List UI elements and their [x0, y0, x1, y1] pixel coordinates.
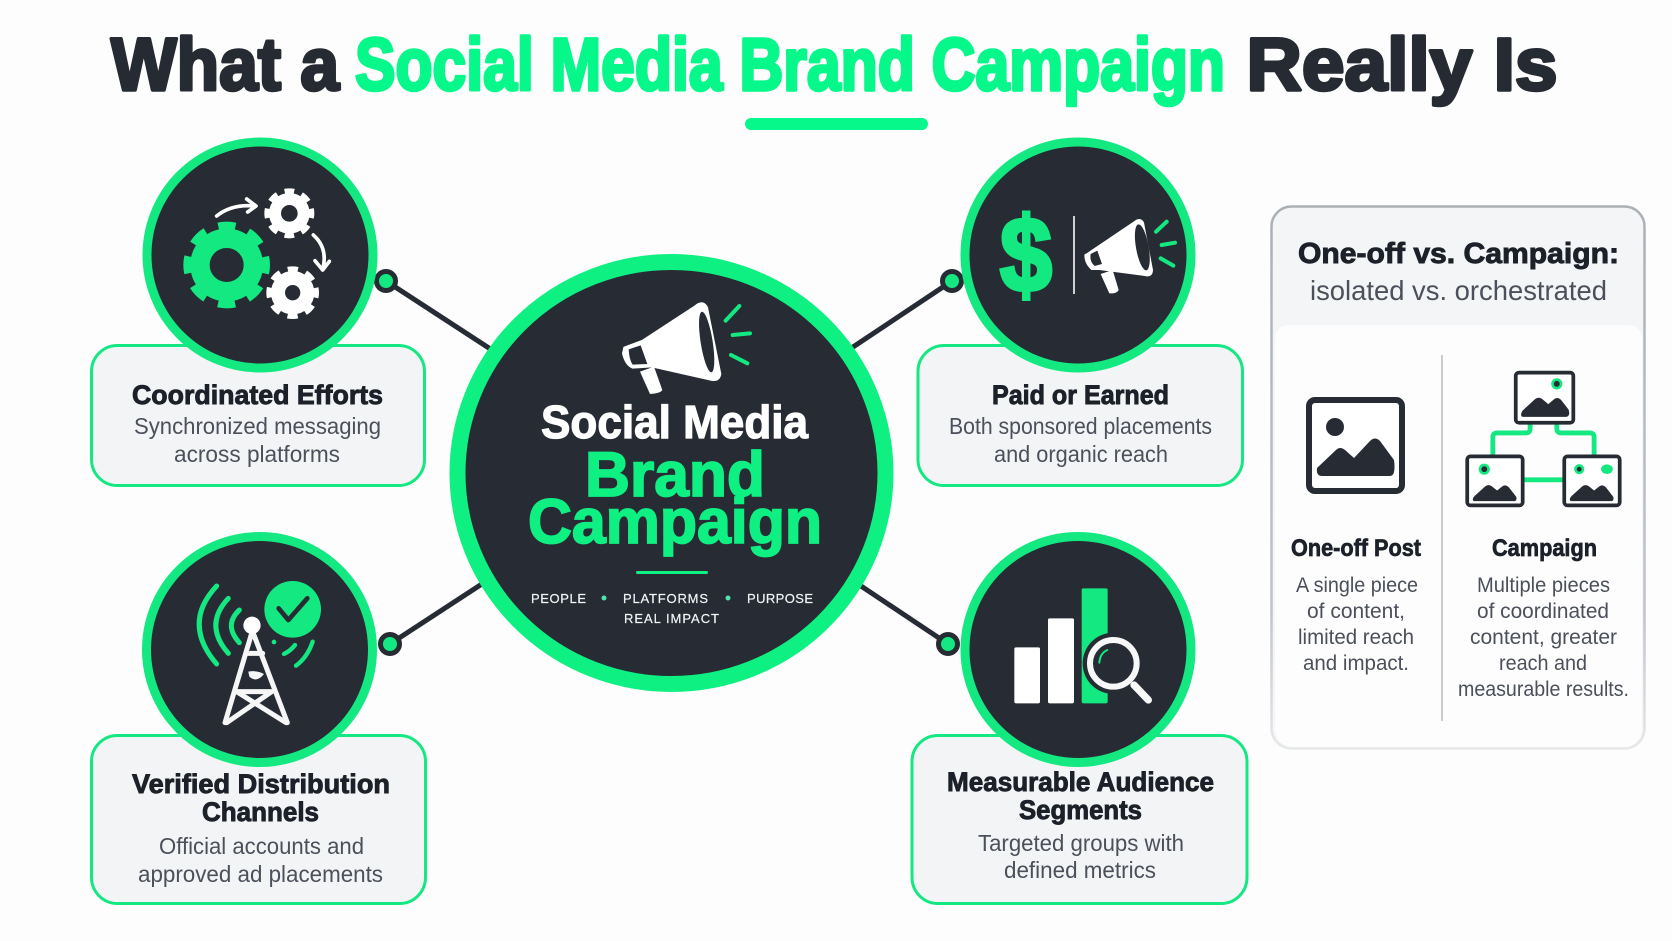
icon: signal tower with check — [146, 536, 372, 762]
panel: one-off vs campaign — [1272, 206, 1644, 748]
panel: measurable audience segments — [912, 536, 1247, 904]
tagline: REAL IMPACT — [624, 611, 719, 626]
text: one-off description — [1296, 574, 1418, 675]
icon: single image — [1309, 400, 1402, 491]
heading: social media: Social Media — [541, 396, 808, 448]
heading: one-off post: One-off Post — [1291, 535, 1421, 562]
text: campaign description: reach and — [1499, 652, 1587, 675]
card: coordinated efforts — [92, 346, 424, 486]
heading: campaign: Campaign — [528, 487, 822, 557]
text: measurable audience description — [978, 830, 1184, 883]
panel: verified distribution channels — [92, 536, 426, 904]
title: Social Media Brand Campaign — [355, 23, 1225, 106]
heading: one-off vs campaign: One-off vs. Campaign: — [1298, 238, 1619, 270]
heading: measurable audience segments: Segments — [1019, 795, 1142, 825]
heading: measurable audience segments — [947, 767, 1214, 825]
panel: paid or earned — [918, 142, 1242, 486]
tagline: PEOPLE — [531, 591, 586, 606]
text: measurable audience description: Targeted groups with — [978, 830, 1184, 856]
text: one-off description: and impact. — [1303, 652, 1409, 675]
text: verified distribution description: approved ad placements — [138, 861, 383, 887]
text: one-off description: limited reach — [1298, 626, 1414, 649]
heading: measurable audience segments: Measurable Audience — [947, 767, 1214, 797]
icon: gears — [147, 142, 373, 368]
heading: verified distribution channels — [132, 769, 390, 827]
divider — [636, 571, 708, 574]
text: verified distribution description: Official accounts and — [159, 833, 364, 859]
text: paid or earned description: and organic reach — [994, 441, 1168, 467]
text: paid or earned description: Both sponsored placements — [949, 413, 1212, 439]
icon: central megaphone — [623, 303, 750, 394]
text: paid or earned description — [949, 413, 1212, 467]
text: campaign description — [1458, 574, 1629, 701]
text: coordinated efforts description — [134, 413, 381, 467]
text: coordinated efforts description: Synchronized messaging — [134, 413, 381, 439]
card: verified distribution channels — [92, 736, 426, 904]
tagline: PLATFORMS — [623, 591, 708, 606]
text: verified distribution description — [138, 833, 383, 887]
subheading: isolated vs orchestrated: isolated vs. orchestrated — [1310, 275, 1607, 306]
text: campaign description: measurable results. — [1458, 678, 1629, 701]
tagline: PURPOSE — [747, 591, 813, 606]
icon: bar chart with magnifier — [965, 536, 1191, 762]
tagline — [531, 591, 813, 626]
card: measurable audience segments — [912, 736, 1247, 904]
icon: campaign network — [1467, 373, 1620, 505]
heading: verified distribution channels: Channels — [202, 797, 319, 827]
text: campaign description: Multiple pieces — [1477, 574, 1610, 597]
text: one-off description: of content, — [1307, 600, 1405, 623]
heading: brand: Brand — [585, 440, 765, 510]
card: paid or earned — [918, 346, 1242, 486]
heading: paid or earned: Paid or Earned — [992, 380, 1169, 410]
panel: coordinated efforts — [92, 142, 424, 486]
text: coordinated efforts description: across platforms — [174, 441, 340, 467]
connectors to central hub — [376, 272, 962, 654]
heading: coordinated efforts: Coordinated Efforts — [132, 380, 383, 410]
text: campaign description: content, greater — [1470, 626, 1617, 649]
icon: dollar and megaphone — [965, 142, 1191, 368]
heading: verified distribution channels: Verified Distribution — [132, 769, 390, 799]
icon: dollar and megaphone: $ — [1000, 196, 1052, 314]
heading: campaign: Campaign — [1492, 535, 1597, 562]
text: campaign description: of coordinated — [1477, 600, 1609, 623]
title underline — [745, 118, 928, 130]
title: What a — [111, 23, 340, 106]
text: measurable audience description: defined metrics — [1004, 857, 1156, 883]
text: one-off description: A single piece — [1296, 574, 1418, 597]
title: Really Is — [1246, 23, 1558, 106]
central hub — [458, 262, 886, 684]
